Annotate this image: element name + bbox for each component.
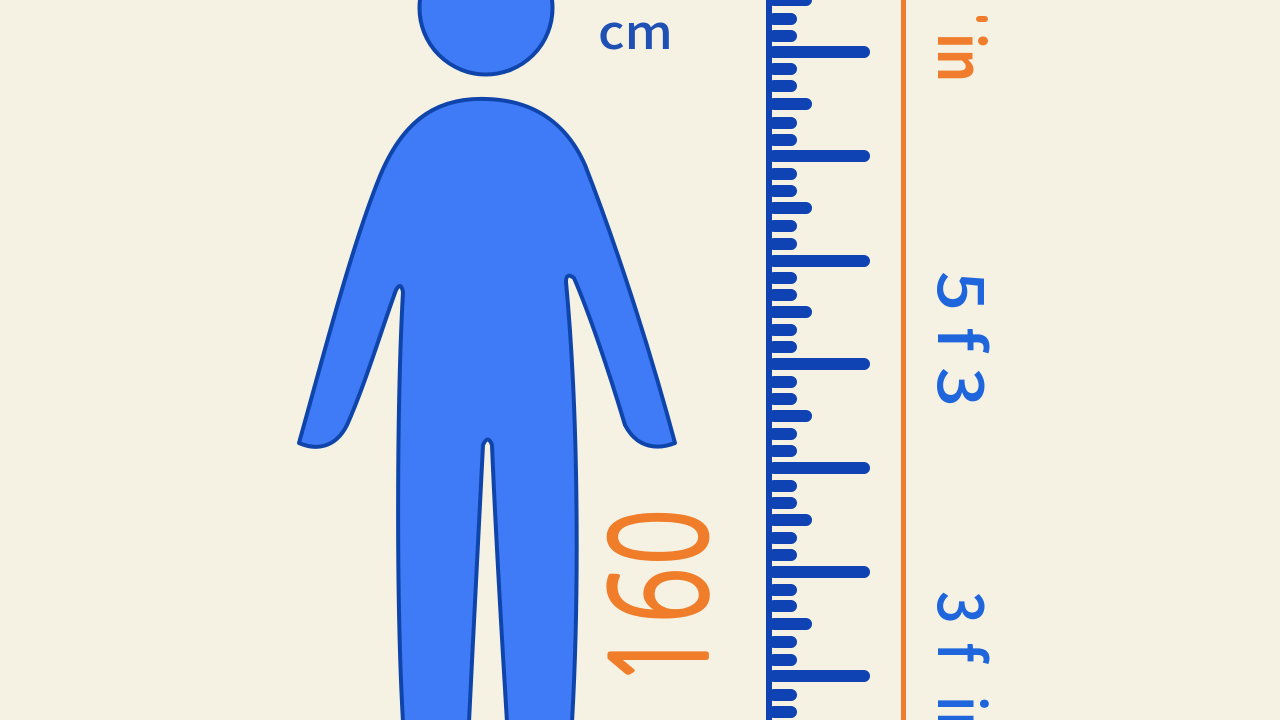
ruler: inch scale line: [901, 0, 906, 720]
icon: human figure: [299, 0, 675, 720]
long ticks: [774, 52, 864, 676]
figure head: [420, 0, 552, 74]
label: 160: 160: [595, 509, 727, 687]
ruler spine: [766, 0, 772, 720]
small ticks: [774, 19, 791, 712]
label: apostrophe mark: [976, 16, 988, 22]
medium ticks: [774, 0, 806, 624]
label: in unit: in: [920, 33, 1010, 82]
ruler: centimetre scale: [766, 0, 864, 720]
figure body: [299, 99, 675, 720]
label: 5 f 3: 5 f 3: [919, 271, 1011, 407]
